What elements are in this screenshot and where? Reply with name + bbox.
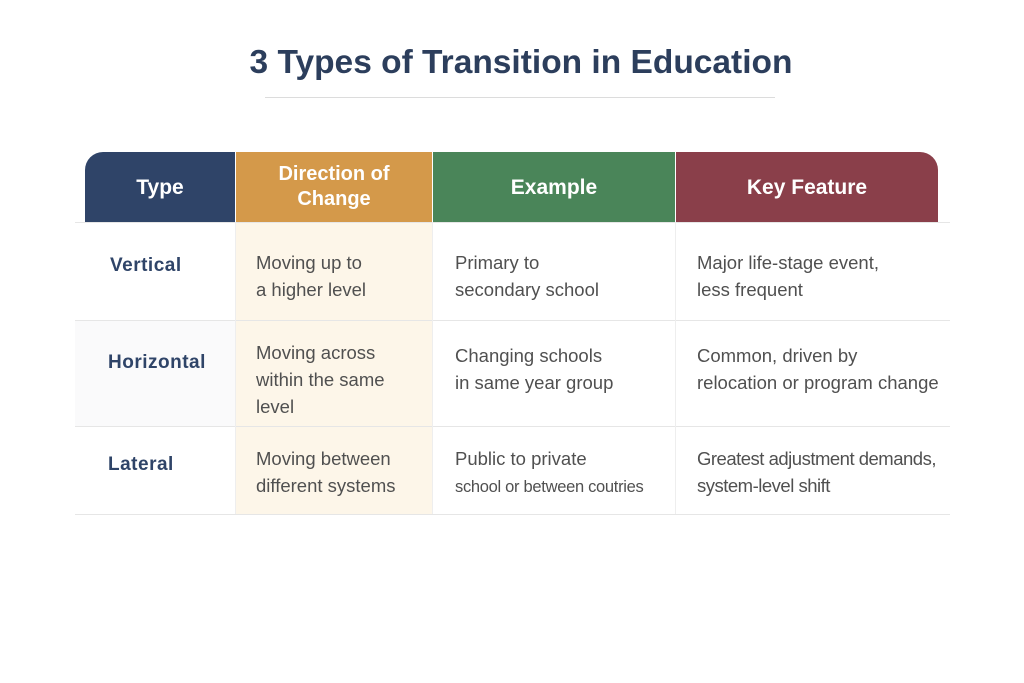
header: Type: Type [136,176,184,198]
row: Vertical: Vertical [110,255,182,276]
header: Key Feature: Key Feature [747,176,867,198]
text: secondary school [455,279,599,300]
header: Type [85,152,235,222]
text: a higher level [256,279,366,300]
text: Primary to [455,252,539,273]
row: Lateral: Lateral [108,454,174,475]
text: relocation or program change [697,372,939,393]
text: Public to private [455,448,587,469]
text: Changing schools [455,345,602,366]
text: level [256,396,294,417]
text: Moving across [256,342,375,363]
text: Moving up to [256,252,362,273]
text: Common, driven by [697,345,857,366]
text: system-level shift [697,475,830,496]
direction column highlight [235,222,432,514]
text: less frequent [697,279,803,300]
header: Direction of Change [236,152,432,222]
table [236,223,432,514]
header: Direction of Change: Change [297,188,371,210]
text: school or between coutries [455,478,643,496]
text: Major life-stage event, [697,252,879,273]
row: Horizontal: Horizontal [108,352,206,373]
header: Direction of Change: Direction of [278,163,390,185]
header: Key Feature [676,152,938,222]
text: Moving between [256,448,391,469]
text: in same year group [455,372,613,393]
text: Greatest adjustment demands, [697,448,936,469]
header: Example: Example [511,176,597,198]
text: different systems [256,475,396,496]
text: within the same [256,369,385,390]
row 2 shading [75,320,235,426]
header: Example [433,152,675,222]
title: 3 Types of Transition in Education [250,44,792,81]
